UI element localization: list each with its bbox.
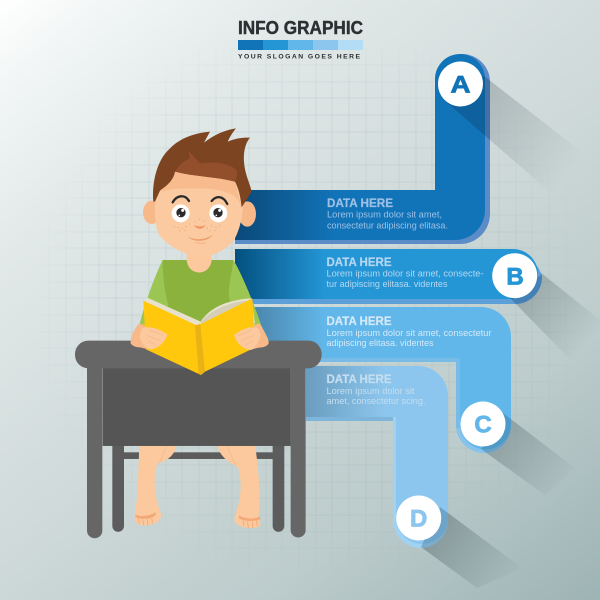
band B main <box>235 249 538 299</box>
book spine <box>195 324 205 375</box>
band C backing <box>255 358 511 453</box>
arms <box>131 323 150 347</box>
band C circle <box>460 402 506 446</box>
desk top <box>75 341 322 368</box>
boy at desk <box>75 128 322 538</box>
band C text: adipiscing elitasa. videntes <box>326 338 434 348</box>
band A text: consectetur adipiscing elitasa. <box>327 220 448 230</box>
band D backing <box>306 417 448 548</box>
band B backing <box>235 255 542 304</box>
book cover <box>143 298 255 375</box>
mouth <box>188 235 212 241</box>
band D main <box>306 366 448 544</box>
band B text: Lorem ipsum dolor sit amet, consecte- <box>326 268 484 278</box>
left hand <box>139 327 167 349</box>
band A text <box>327 198 448 230</box>
band C text <box>326 316 492 348</box>
drawer panel <box>103 365 291 446</box>
band A main <box>235 54 485 240</box>
colour bar <box>238 40 363 50</box>
band A circle <box>438 62 483 106</box>
shirt <box>139 260 262 347</box>
band B circle: B <box>506 264 524 290</box>
band C circle: C <box>474 412 492 438</box>
eyes <box>172 204 190 222</box>
book and hands <box>131 298 269 375</box>
band A <box>235 54 490 244</box>
desk front <box>75 341 322 538</box>
band D circle <box>396 496 441 540</box>
face <box>155 174 243 257</box>
band D text <box>326 374 426 406</box>
freckles <box>174 219 221 232</box>
band B circle <box>492 253 537 298</box>
band C text: Lorem ipsum dolor sit amet, consectetur <box>326 328 492 338</box>
band D text: DATA HERE <box>326 374 392 386</box>
band A circle: A <box>450 72 470 98</box>
band B <box>235 249 542 304</box>
eyebrows <box>173 196 189 202</box>
band C shadow overlay <box>481 413 511 453</box>
band B text: tur adipiscing elitasa. videntes <box>326 279 448 289</box>
band B shadow overlay <box>510 274 542 304</box>
title block <box>238 17 363 60</box>
band C text: DATA HERE <box>326 316 392 328</box>
forehead shade <box>162 172 242 207</box>
band D circle: D <box>410 506 427 532</box>
band B text <box>326 257 484 289</box>
band A text: DATA HERE <box>327 198 393 210</box>
pages <box>143 298 255 337</box>
title: INFO GRAPHIC <box>238 17 363 38</box>
hair highlight <box>175 151 237 182</box>
band C main <box>255 307 511 450</box>
slogan: YOUR SLOGAN GOES HERE <box>238 54 360 60</box>
hair <box>153 128 252 207</box>
ears <box>143 201 160 224</box>
long shadows of the four bands <box>421 76 600 588</box>
band D text: amet, consectetur scing. <box>326 396 426 406</box>
head <box>143 128 256 274</box>
band C <box>255 307 511 453</box>
band A text: Lorem ipsum dolor sit amet, <box>327 210 442 220</box>
band A shadow overlay <box>444 76 490 140</box>
band D <box>306 366 448 548</box>
nose <box>194 225 205 229</box>
front legs <box>87 363 102 538</box>
neck <box>187 247 212 274</box>
right hand <box>234 327 262 350</box>
desk back legs and crossbar <box>112 445 284 532</box>
legs and feet <box>135 445 261 528</box>
band A backing <box>235 54 490 244</box>
band D shadow overlay <box>421 507 448 548</box>
band D text: Lorem ipsum dolor sit <box>326 386 415 396</box>
band B text: DATA HERE <box>326 257 392 269</box>
